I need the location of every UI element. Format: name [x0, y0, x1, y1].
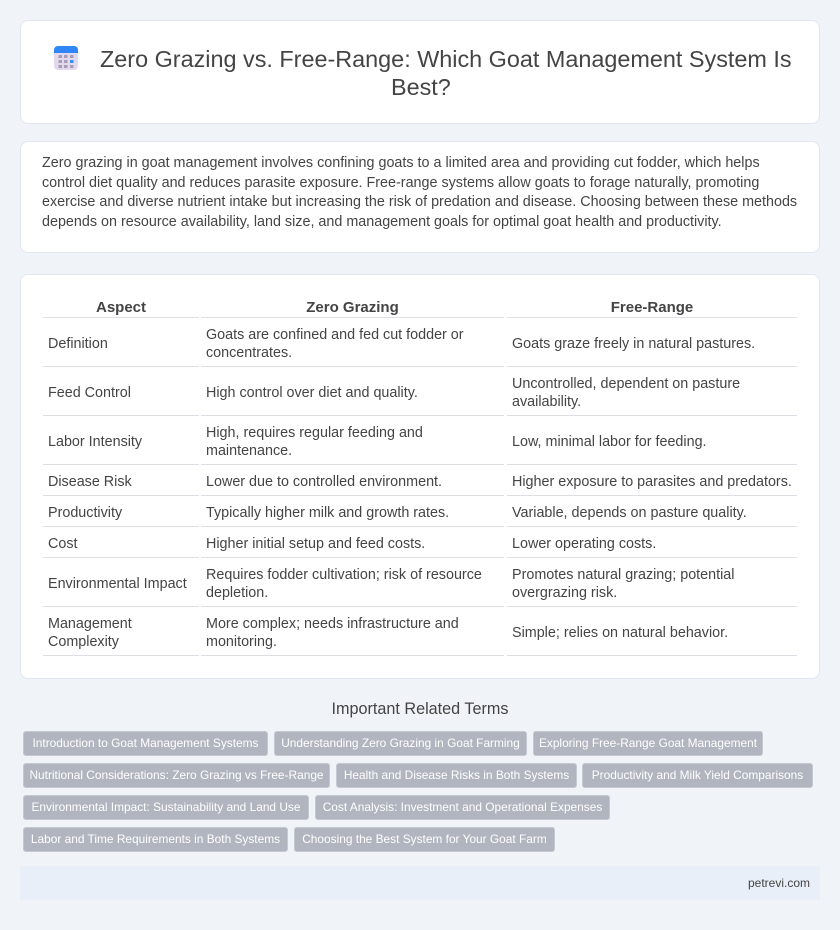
row: cost: Higher initial setup and feed costs. — [206, 536, 425, 552]
tag: Cost Analysis: Investment and Operational Expenses — [323, 800, 602, 814]
row: productivity: Variable, depends on pasture quality. — [512, 505, 747, 521]
row: cost — [48, 536, 656, 552]
tag — [23, 827, 288, 852]
row: definition: concentrates. — [206, 345, 292, 361]
row: disease risk — [48, 474, 792, 490]
footer bar — [20, 866, 820, 900]
panel: title card — [20, 20, 820, 124]
row: environmental impact: overgrazing risk. — [512, 585, 617, 601]
title: Zero Grazing vs. Free-Range: Which Goat Management System Is — [100, 46, 792, 72]
intro text: Zero grazing in goat management involves confining goats to a limited area and providing cut fodder, which helps — [42, 155, 760, 171]
tag: Understanding Zero Grazing in Goat Farming — [281, 736, 520, 750]
row: environmental impact: Requires fodder cultivation; risk of resource — [206, 567, 482, 583]
tag — [23, 795, 309, 820]
tag — [294, 827, 555, 852]
tag — [315, 795, 610, 820]
row: cost: Lower operating costs. — [512, 536, 656, 552]
row: definition — [48, 327, 755, 361]
tag: Labor and Time Requirements in Both Systems — [31, 832, 280, 846]
tag: Productivity and Milk Yield Comparisons — [592, 768, 803, 782]
row: disease risk: Disease Risk — [48, 474, 132, 490]
row: labor intensity: Low, minimal labor for feeding. — [512, 434, 707, 450]
row: management complexity: Complexity — [48, 634, 119, 650]
row: management complexity: Management — [48, 616, 132, 632]
row: management complexity: monitoring. — [206, 634, 277, 650]
row: cost: Cost — [48, 536, 78, 552]
row: environmental impact: depletion. — [206, 585, 268, 601]
tag: Choosing the Best System for Your Goat Farm — [302, 832, 547, 846]
row: labor intensity: maintenance. — [206, 443, 292, 459]
footer: site name: petrevi.com — [748, 876, 810, 890]
row: productivity: Typically higher milk and growth rates. — [206, 505, 449, 521]
row: definition: Definition — [48, 336, 108, 352]
row: management complexity: More complex; needs infrastructure and — [206, 616, 459, 632]
title — [100, 46, 792, 100]
row: management complexity — [48, 616, 728, 650]
row: environmental impact: Environmental Impact — [48, 576, 187, 592]
row: feed control — [48, 376, 740, 410]
header: aspect: Aspect — [96, 299, 146, 316]
row: environmental impact — [48, 567, 734, 601]
panel: intro card — [20, 141, 820, 253]
tag — [533, 731, 763, 756]
row: feed control: High control over diet and quality. — [206, 385, 418, 401]
row: feed control: availability. — [512, 394, 581, 410]
row: disease risk: Higher exposure to parasites and predators. — [512, 474, 792, 490]
intro text: depends on resource availability, land size, and management goals for optimal goat health and productivity. — [42, 214, 722, 230]
row: definition: Goats are confined and fed cut fodder or — [206, 327, 464, 343]
tag — [23, 731, 268, 756]
header: zero grazing: Zero Grazing — [306, 299, 399, 316]
row: labor intensity: Labor Intensity — [48, 434, 142, 450]
intro text: exercise and diverse nutrient intake but increasing the risk of predation and disease. Choosing between these methods — [42, 194, 797, 210]
tag — [274, 731, 527, 756]
row: environmental impact: Promotes natural grazing; potential — [512, 567, 734, 583]
row: productivity — [48, 505, 747, 521]
row: labor intensity: High, requires regular feeding and — [206, 425, 423, 441]
icon: calendar — [54, 46, 78, 70]
row: labor intensity — [48, 425, 707, 459]
tag: Introduction to Goat Management Systems — [32, 736, 259, 750]
intro text: control diet quality and reduces parasite exposure. Free-range systems allow goats to forage naturally, promoting — [42, 175, 759, 191]
row: productivity: Productivity — [48, 505, 122, 521]
tag: Exploring Free-Range Goat Management — [539, 736, 757, 750]
panel: comparison table card — [20, 274, 820, 679]
intro text — [42, 155, 797, 230]
tag: Health and Disease Risks in Both Systems — [344, 768, 569, 782]
title: Best? — [391, 74, 451, 100]
row: feed control: Feed Control — [48, 385, 131, 401]
tag: Environmental Impact: Sustainability and Land Use — [31, 800, 300, 814]
heading: important related terms: Important Related Terms — [332, 700, 508, 718]
row: feed control: Uncontrolled, dependent on pasture — [512, 376, 740, 392]
tag: Nutritional Considerations: Zero Grazing vs Free-Range — [29, 768, 324, 782]
tag — [23, 763, 330, 788]
tag — [582, 763, 813, 788]
row: definition: Goats graze freely in natural pastures. — [512, 336, 755, 352]
row: management complexity: Simple; relies on natural behavior. — [512, 625, 728, 641]
row: disease risk: Lower due to controlled environment. — [206, 474, 442, 490]
header: free-range: Free-Range — [611, 299, 693, 316]
tag — [336, 763, 577, 788]
